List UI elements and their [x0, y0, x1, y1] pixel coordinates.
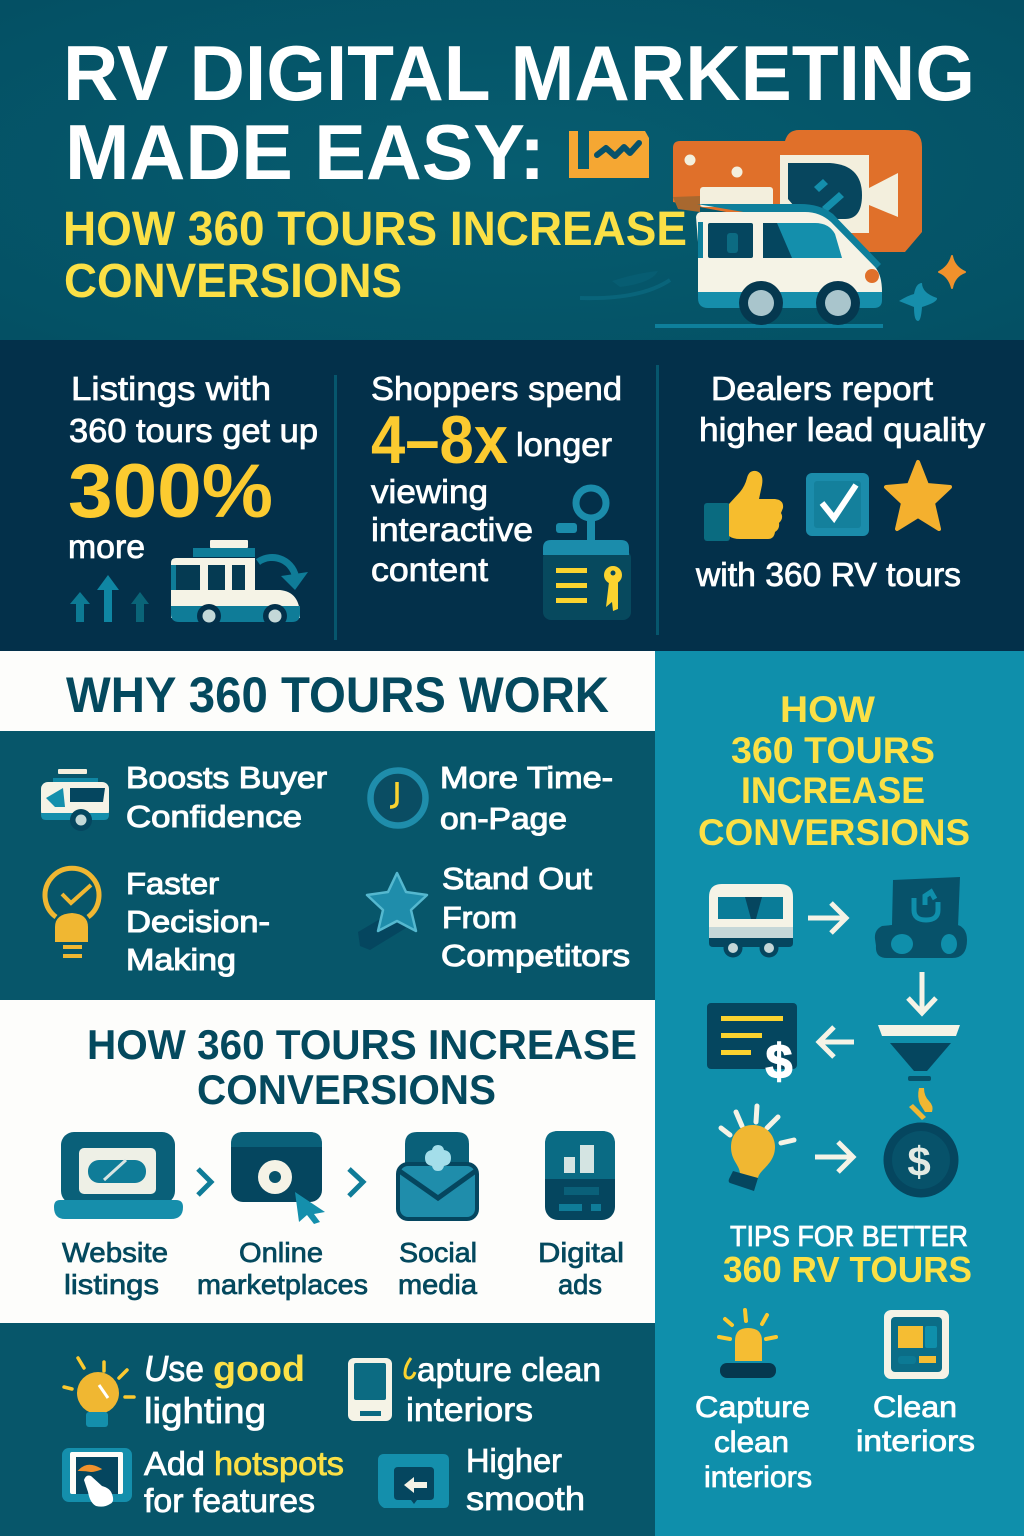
arrow — [198, 1169, 211, 1195]
stat: 4-8x longer: longer — [516, 426, 612, 463]
icon: caravan — [41, 769, 109, 831]
item: more time-on-page — [370, 760, 613, 836]
heading: tips: 360 RV TOURS — [723, 1249, 972, 1290]
icon: star — [886, 462, 950, 529]
arrow — [908, 972, 936, 1013]
tip: hotspots — [62, 1445, 344, 1519]
item: faster decision-making: Making — [126, 942, 236, 977]
item: boosts buyer confidence: Confidence — [126, 799, 302, 834]
panel: header — [0, 0, 1024, 340]
tip: clean interiors: interiors — [406, 1391, 533, 1428]
title: MADE EASY: — [65, 108, 545, 196]
channel: online marketplaces: marketplaces — [197, 1269, 368, 1300]
panel: tips — [0, 1323, 655, 1536]
tip: lighting: good — [213, 1348, 305, 1389]
item: stand out from competitors — [358, 861, 630, 973]
heading: HOW 360 TOURS INCREASE — [87, 1021, 637, 1068]
icon: lightbulb — [721, 1106, 794, 1191]
icon: tag with key — [543, 488, 631, 620]
channel: digital ads — [538, 1131, 624, 1300]
icon: envelope — [398, 1132, 477, 1219]
arrow — [808, 903, 846, 933]
icon: dollar coin — [884, 1122, 958, 1198]
stat: 4-8x longer — [371, 370, 631, 620]
icon: lightbulb — [64, 1358, 134, 1427]
heading: INCREASE — [741, 770, 925, 811]
icon: touch screen — [62, 1448, 132, 1507]
channel: online marketplaces — [197, 1132, 368, 1300]
item: faster decision-making — [45, 866, 270, 977]
illustration: camper van with video camera — [580, 130, 922, 328]
tip: higher smooth: smooth — [466, 1480, 585, 1517]
heading: CONVERSIONS — [698, 812, 970, 853]
stat: 4-8x longer: viewing — [371, 473, 488, 510]
channel: digital ads: Digital — [538, 1237, 624, 1268]
item: stand out from competitors: From — [442, 900, 517, 935]
panel: why 360 tours work — [0, 651, 655, 1000]
heading: 360 TOURS — [731, 730, 935, 771]
stat: 300% more — [68, 370, 318, 628]
heading — [698, 689, 970, 853]
icon: star — [358, 873, 427, 950]
arrow — [815, 1142, 853, 1172]
item: more time-on-page: on-Page — [440, 801, 567, 836]
subtitle — [63, 203, 687, 308]
icon: phone — [348, 1358, 392, 1421]
stat: higher lead quality: Dealers report — [711, 370, 933, 407]
channel: social media: Social — [399, 1237, 477, 1268]
icon: bus — [709, 884, 793, 958]
tip: higher smooth: Higher — [466, 1442, 562, 1479]
icon: dark vehicle — [875, 877, 967, 958]
tip: lighting: Use — [144, 1348, 204, 1389]
title: RV DIGITAL MARKETING — [63, 29, 975, 117]
icon: window — [884, 1310, 949, 1379]
panel: key stats — [0, 340, 1024, 651]
item: faster decision-making: Faster — [126, 866, 219, 901]
heading: HOW — [780, 689, 875, 730]
stat: 4-8x longer: content — [371, 551, 488, 588]
tip: capture clean interiors: interiors — [704, 1461, 812, 1494]
item: stand out from competitors: Competitors — [441, 938, 630, 973]
arrow — [349, 1169, 363, 1196]
item: more time-on-page: More Time- — [440, 760, 613, 795]
channel: online marketplaces: Online — [239, 1237, 323, 1268]
stat: 4-8x longer: interactive — [371, 511, 533, 548]
icon: up arrows — [70, 575, 149, 622]
channel: digital ads: ads — [558, 1269, 602, 1300]
tip: clean interiors — [856, 1310, 975, 1458]
icon: beacon — [719, 1310, 776, 1378]
icon: chart — [569, 131, 649, 178]
icon: back arrow tile — [378, 1454, 449, 1508]
icon: thumbs up — [704, 471, 783, 541]
stat: 300% more: Listings with — [71, 370, 271, 407]
icon: check box — [806, 473, 869, 536]
arrow — [819, 1027, 854, 1057]
channel: social media: media — [398, 1269, 477, 1300]
panel: right column — [655, 651, 1024, 1536]
heading: WHY 360 TOURS WORK — [66, 667, 609, 723]
icon: invoice with dollar — [707, 1003, 797, 1089]
stat: higher lead quality: higher lead quality — [699, 411, 986, 448]
title — [63, 29, 975, 196]
item: boosts buyer confidence: Boosts Buyer — [126, 760, 327, 795]
item: stand out from competitors: Stand Out — [442, 861, 592, 896]
heading: CONVERSIONS — [197, 1066, 496, 1113]
heading: tips: TIPS FOR BETTER — [730, 1221, 968, 1253]
tip: higher smooth — [378, 1442, 585, 1517]
icon: sparkles — [899, 256, 965, 321]
icon: ad tablet — [545, 1131, 615, 1220]
icon: laptop — [54, 1132, 183, 1219]
channel: social media — [398, 1132, 477, 1300]
tip: capture clean interiors: clean — [714, 1426, 789, 1459]
channel: website listings: listings — [64, 1269, 159, 1300]
heading — [87, 1021, 637, 1113]
icon: invoice with dollar: $ — [766, 1036, 793, 1089]
icon: dollar coin: $ — [907, 1138, 931, 1185]
channel: website listings: Website — [62, 1237, 168, 1268]
subtitle: CONVERSIONS — [64, 255, 402, 308]
item: faster decision-making: Decision- — [126, 904, 270, 939]
tip: capture clean interiors: Capture — [695, 1391, 810, 1424]
tip: clean interiors — [348, 1351, 601, 1428]
icon: clock — [370, 770, 426, 826]
tip: capture clean interiors — [695, 1310, 812, 1494]
stat: 4-8x longer: Shoppers spend — [371, 370, 622, 407]
stat: higher lead quality — [695, 370, 986, 593]
stat: 300% more: 300% — [68, 449, 273, 534]
panel: channels — [0, 1000, 655, 1323]
tip: clean interiors: apture clean — [417, 1351, 601, 1388]
stat: 300% more: 360 tours get up — [69, 412, 318, 449]
tip: clean interiors: Clean — [873, 1391, 957, 1424]
item: boosts buyer confidence — [41, 760, 327, 834]
tip: hotspots: for features — [144, 1482, 315, 1519]
tip: hotspots: hotspots — [214, 1445, 344, 1482]
heading: tips — [723, 1221, 972, 1290]
stat: 300% more: more — [68, 528, 145, 565]
icon: browser with cursor — [231, 1132, 325, 1224]
subtitle: HOW 360 TOURS INCREASE — [63, 203, 687, 256]
tip: lighting — [64, 1348, 305, 1431]
icon: lightbulb with check — [45, 868, 99, 958]
channel: website listings — [54, 1132, 183, 1300]
tip: hotspots: Add — [144, 1445, 205, 1482]
flow diagram — [707, 877, 967, 1198]
stat: higher lead quality: with 360 RV tours — [695, 556, 961, 593]
tip: clean interiors: interiors — [856, 1425, 975, 1458]
icon: RV with arrow — [171, 540, 308, 628]
icon: funnel — [878, 1025, 960, 1120]
stat: 4-8x longer: 4–8x — [371, 402, 508, 478]
tip: lighting: lighting — [144, 1390, 266, 1431]
